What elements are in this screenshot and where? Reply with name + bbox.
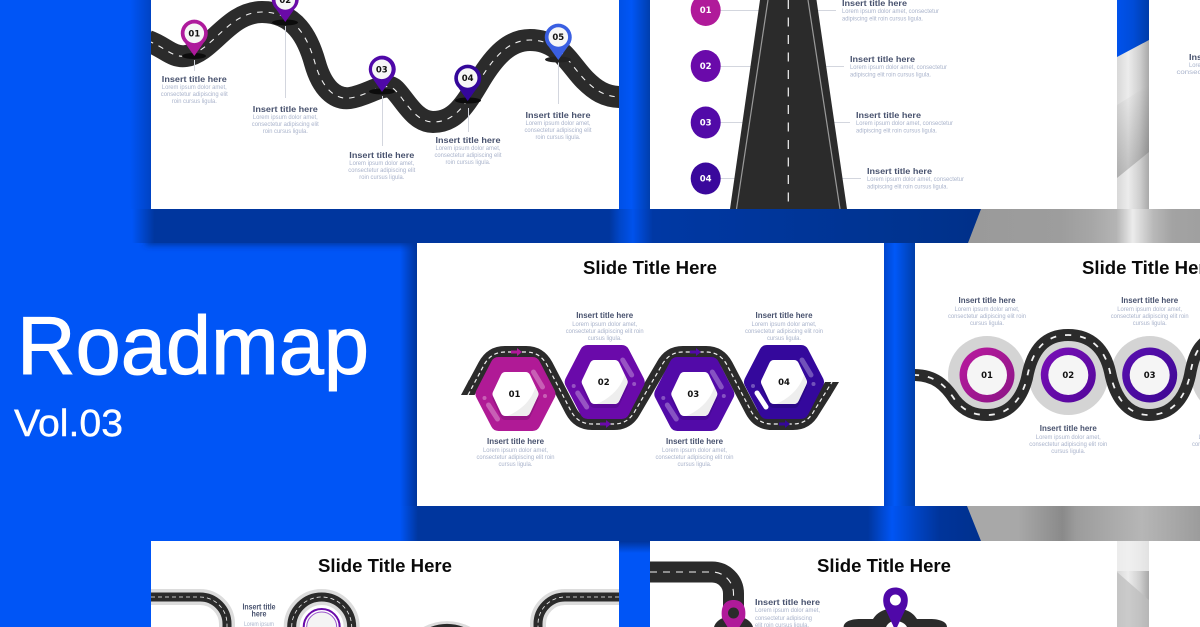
text block 03: cursus ligula. [678, 462, 712, 468]
pin 01 [181, 20, 208, 59]
text block 01: consectetur adipiscing elit [161, 92, 228, 98]
text block 04: cursus ligula. [767, 336, 801, 342]
background: soft shadow under band [146, 234, 436, 245]
text block 01: consectetur adipiscing elit roin [476, 455, 554, 461]
hexagon 01: 01 [509, 390, 520, 400]
road [461, 352, 839, 424]
road [913, 335, 1200, 415]
text block 04: Insert title here [436, 135, 501, 145]
text block 01 [842, 0, 939, 22]
text block 02: roin cursus ligula. [263, 129, 308, 135]
pin 02 [272, 0, 299, 26]
text block 03: Insert title here [856, 110, 921, 120]
pin 03: 03 [376, 66, 388, 76]
background: dark band under centre slides [400, 506, 1000, 541]
text block 05: Lorem ipsum dolor amet, [526, 121, 591, 127]
node 02 [1041, 348, 1096, 402]
node 03 [1122, 348, 1177, 402]
text block 02: cursus ligula. [1051, 449, 1086, 455]
background: shadow fade in bottom gap [619, 541, 650, 553]
text block 02: Insert title here [576, 311, 634, 320]
background: dark band under top slides [132, 209, 1000, 243]
text block 03: Lorem ipsum dolor amet, [662, 448, 727, 454]
road centre loop [292, 597, 352, 627]
slide: top right partial [1149, 0, 1200, 209]
road [650, 572, 753, 627]
text block 01: Lorem ipsum dolor amet, [954, 307, 1020, 313]
text block 01: Lorem ipsum dolor amet, [483, 448, 548, 454]
hexagon 04: 04 [778, 378, 790, 388]
road lower arc [424, 621, 470, 627]
text block 03: cursus ligula. [1133, 321, 1167, 327]
text block 02: Lorem ipsum dolor amet, [1036, 435, 1101, 441]
text block 03: Lorem ipsum dolor amet, [349, 161, 415, 167]
pin 05 [545, 24, 572, 63]
background: gap between top slides [619, 0, 650, 209]
slide: winding road with pins [151, 0, 619, 209]
circle 02: 02 [700, 62, 712, 72]
hexagon 03 [661, 365, 726, 423]
circle 04: 04 [700, 175, 712, 185]
text block 02: Insert title here [850, 54, 915, 64]
text block 05: Insert title here [526, 110, 591, 120]
text block 02: Lorem ipsum dolor amet, consectetur [850, 65, 947, 71]
slide: looping road with halo [151, 541, 619, 627]
text block 01 [948, 296, 1026, 327]
text block 05 [524, 110, 592, 141]
pin 01: 01 [188, 30, 200, 40]
leader lines [194, 26, 558, 146]
circle 01: 01 [700, 6, 712, 16]
hexagon 02: 02 [598, 378, 610, 388]
text block 01 [161, 74, 228, 105]
text block: Insert title [242, 602, 276, 612]
text block 02: Insert title here [1040, 424, 1097, 433]
node 01: 01 [981, 371, 993, 381]
hexagon 04 [751, 353, 816, 411]
text block 04 [1192, 424, 1200, 455]
road surface [730, 0, 847, 209]
text block 02 [252, 104, 319, 135]
text block 03: Insert title here [349, 150, 415, 160]
text block 02: cursus ligula. [588, 336, 622, 342]
slide title: Slide Title Here [318, 556, 452, 576]
text block 04: Lorem ipsum dolor amet, consectetur [867, 177, 964, 183]
text block 05: consectetur adipiscing elit [524, 128, 592, 134]
circle 04 [691, 162, 721, 194]
heading: Roadmap: Roadmap [17, 299, 369, 392]
text block 03: Insert title here [1121, 296, 1179, 305]
text block: here [252, 610, 267, 618]
text block 02: consectetur adipiscing elit roin [1029, 442, 1107, 448]
node 01 [960, 348, 1014, 402]
text block 03: consectetur adipiscing elit [348, 168, 416, 174]
text block 01 [476, 437, 554, 468]
slide title: Slide Title Here [583, 258, 717, 278]
text block 03 [348, 150, 416, 181]
text block 05: roin cursus ligula. [536, 135, 581, 141]
text block 01: Insert title here [162, 74, 227, 84]
text block 02: Lorem ipsum dolor amet, [572, 322, 638, 328]
circle 02 [691, 50, 721, 82]
text block 03: roin cursus ligula. [359, 175, 405, 181]
text block 01: cursus ligula. [498, 462, 533, 468]
text block 04: Insert title here [867, 166, 932, 176]
slide title: Slide Title Here [817, 556, 951, 576]
magenta pin [722, 600, 745, 627]
purple pin [883, 588, 908, 627]
leader lines [720, 10, 861, 178]
circle 03 [691, 106, 721, 138]
hexagon 03: 03 [687, 390, 699, 400]
hexagon 02 [572, 353, 637, 411]
text block 04: consectetur adipiscing elit [434, 153, 502, 159]
text block 02: Insert title here [253, 104, 318, 114]
text block 02: consectetur adipiscing elit [252, 122, 319, 128]
text block 03 [856, 110, 953, 134]
text block 02 [566, 311, 644, 342]
text block 04: adipiscing elit roin cursus ligula. [867, 184, 948, 190]
grey discs [948, 335, 1200, 415]
background: grey swoosh [967, 40, 1200, 627]
white gap under pin [886, 621, 907, 627]
text block 01: adipiscing elit roin cursus ligula. [842, 16, 923, 22]
text block 01: Insert title here [958, 296, 1016, 305]
text block 03: consectetur adipiscing elit roin [1111, 314, 1189, 320]
hexagon 01 [482, 365, 548, 423]
text block 03: adipiscing elit roin cursus ligula. [856, 128, 937, 134]
text block 02: Lorem ipsum dolor amet, [253, 115, 318, 121]
text block: Lorem ipsum dolor amet, [755, 608, 820, 614]
text block [242, 602, 276, 627]
node 02: 02 [1062, 371, 1074, 381]
text block 03: Insert title here [666, 437, 724, 446]
text block 04: Lorem ipsum dolor amet, [752, 322, 817, 328]
text block 02: consectetur adipiscing elit roin [566, 329, 644, 335]
subheading: Vol.03: Vol.03 [14, 403, 123, 445]
pin 03 [369, 56, 396, 94]
pin 05: 05 [552, 33, 564, 43]
pin 04 [454, 65, 481, 104]
text block 01: roin cursus ligula. [172, 99, 217, 105]
text block 01: Lorem ipsum dolor amet, [162, 85, 227, 91]
pin 04: 04 [462, 74, 474, 84]
road left [151, 597, 227, 627]
text block 03: consectetur adipiscing elit roin [656, 455, 734, 461]
arrows on road [511, 348, 790, 428]
text block 04: Lorem ipsum dolor amet, [436, 146, 501, 152]
text block 03 [1111, 296, 1189, 327]
text block 01: Insert title here [487, 437, 545, 446]
background: gap between centre slides [884, 243, 915, 506]
text block 03 [656, 437, 734, 468]
background: blue top of right gap [1117, 0, 1149, 62]
road [148, 12, 621, 122]
text block 01: Lorem ipsum dolor amet, consectetur [842, 9, 939, 15]
text block 04: roin cursus ligula. [446, 160, 491, 166]
circle 03: 03 [700, 119, 712, 129]
text block 04 [745, 311, 823, 342]
text block: Insert title here [755, 597, 820, 607]
text block 02 [850, 54, 947, 78]
text block 02: adipiscing elit roin cursus ligula. [850, 72, 931, 78]
text block [755, 597, 820, 627]
road right [538, 597, 619, 627]
text block 04: consectetur adipiscing elit roin [745, 329, 823, 335]
text block 01: consectetur adipiscing elit roin [948, 314, 1026, 320]
slide: serpentine road with circles [915, 243, 1200, 506]
background: shadow left of centre slide [400, 243, 417, 506]
text block 03: Lorem ipsum dolor amet, [1117, 307, 1183, 313]
text block partial [1176, 52, 1200, 76]
slide: hexagon road [417, 243, 884, 506]
text block 04 [867, 166, 964, 190]
background: shadow left of top slide [130, 0, 151, 209]
text block 03: Lorem ipsum dolor amet, consectetur [856, 121, 953, 127]
circle 01 [691, 0, 721, 26]
slide: road with map pins [650, 541, 1117, 627]
text block 04: Insert title here [756, 311, 813, 320]
text block 04 [434, 135, 502, 166]
slide: bottom right partial [1149, 541, 1200, 627]
text block: consectetur adipiscing [755, 616, 812, 622]
text block 02 [1029, 424, 1107, 455]
road junction [844, 608, 947, 627]
slide: straight road with numbered circles [650, 0, 1117, 209]
text block 01: cursus ligula. [970, 321, 1004, 327]
node 03: 03 [1144, 371, 1156, 381]
